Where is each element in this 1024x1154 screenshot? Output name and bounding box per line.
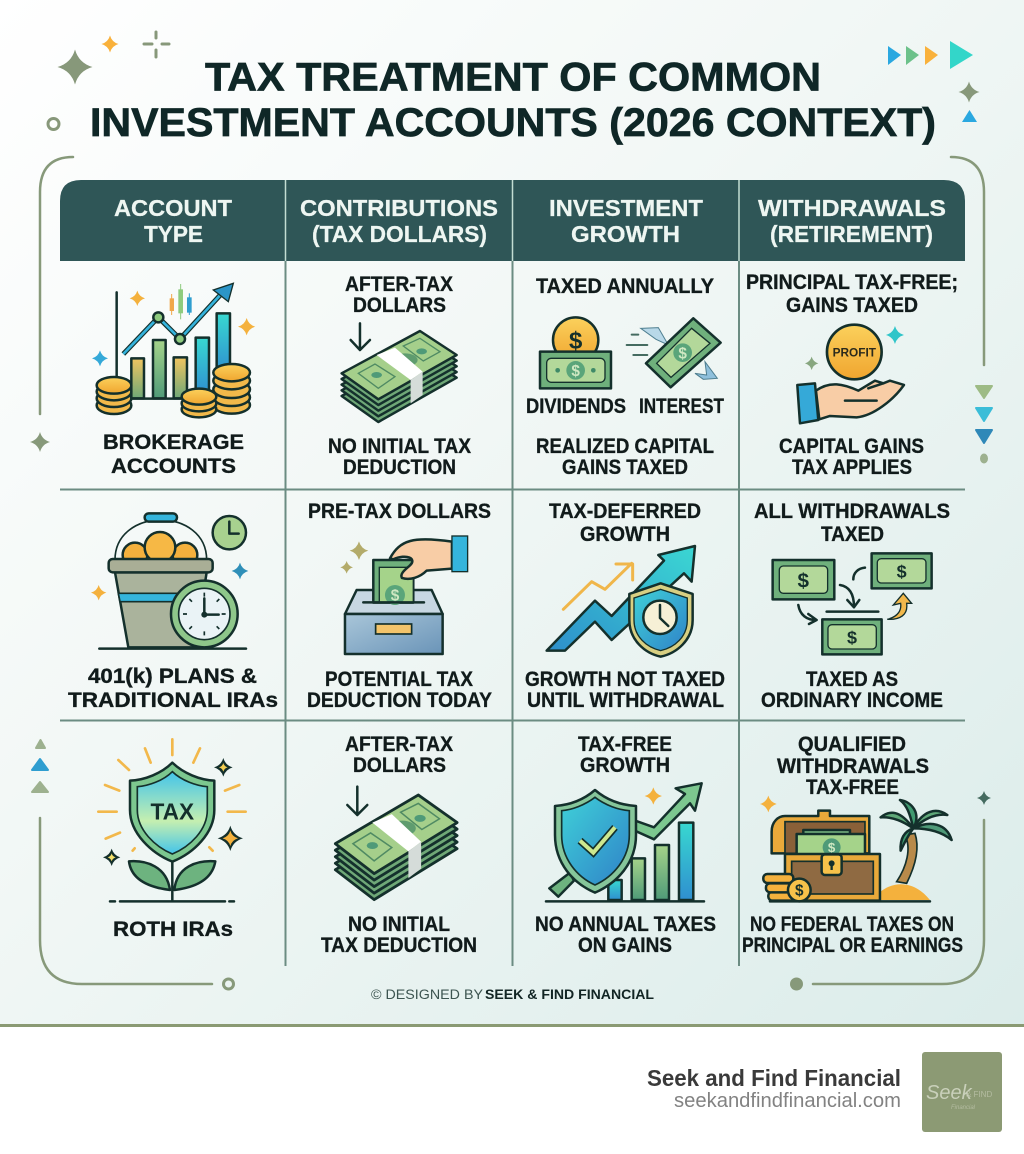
icon: treasure chest and palm tree: [760, 796, 952, 901]
icon: hand dropping money into box: [340, 536, 468, 654]
row 3 growth: [535, 732, 716, 957]
label: 401(k) plans & traditional IRAs: [68, 664, 278, 712]
note: no initial tax deduction: [328, 434, 472, 479]
note: no annual taxes on gains: NO ANNUAL TAXES: [535, 912, 716, 936]
icon: flying interest bill: $: [678, 345, 687, 362]
icon: hand holding profit coin: PROFIT: [833, 346, 877, 360]
note: no federal taxes on principal or earnings: PRINCIPAL OR EARNINGS: [742, 933, 963, 957]
table header: (RETIREMENT): [770, 221, 933, 247]
heading: tax-deferred growth: TAX-DEFERRED: [549, 499, 701, 523]
heading: tax-free growth: TAX-FREE: [578, 732, 672, 756]
label: brokerage accounts: ACCOUNTS: [111, 454, 236, 478]
table header: INVESTMENT: [549, 195, 703, 221]
heading: tax-free growth: GROWTH: [580, 753, 670, 777]
note: no federal taxes on principal or earnings: NO FEDERAL TAXES ON: [750, 912, 954, 936]
brand text: Seek and Find Financial: [647, 1065, 901, 1091]
heading: tax-deferred growth: GROWTH: [580, 522, 670, 546]
icon: dividends coin and bill: $: [571, 363, 580, 380]
icon: growth arrows with clock shield: [547, 546, 695, 657]
heading: principal tax-free; gains taxed: [746, 270, 958, 317]
icon: dividends coin and bill: $: [569, 327, 582, 354]
heading: principal tax-free; gains taxed: GAINS TAXED: [786, 293, 918, 317]
note: no initial tax deduction: NO INITIAL TAX: [328, 434, 472, 458]
note: taxed as ordinary income: [761, 667, 943, 712]
footer divider: [0, 1024, 1024, 1027]
icon: three bills with arrows: [773, 553, 932, 654]
table header: CONTRIBUTIONS: [300, 195, 498, 221]
note: realized capital gains taxed: GAINS TAXED: [562, 455, 688, 479]
icon: treasure chest and palm tree: $: [828, 840, 836, 855]
heading: after-tax dollars: [345, 732, 454, 777]
heading: all withdrawals taxed: [754, 499, 950, 546]
heading: qualified withdrawals tax-free: [777, 732, 929, 799]
title: TAX TREATMENT OF COMMON: [205, 56, 821, 100]
table header: WITHDRAWALS: [758, 195, 946, 221]
row 2 contributions: [307, 499, 492, 712]
brand logo: [922, 1052, 1002, 1132]
brand text: [647, 1065, 901, 1112]
labels: dividends and interest: [526, 394, 724, 418]
side ornaments: [30, 386, 992, 805]
brand logo: Financial: [951, 1105, 976, 1111]
icon: tax shield on plant: [98, 739, 246, 901]
note: growth not taxed until withdrawal: [525, 667, 725, 712]
note: no annual taxes on gains: [535, 912, 716, 957]
note: capital gains tax applies: CAPITAL GAINS: [779, 434, 924, 458]
row 1 withdrawals: [746, 270, 958, 479]
note: realized capital gains taxed: [536, 434, 714, 479]
heading: qualified withdrawals tax-free: QUALIFIED: [798, 732, 906, 756]
heading: qualified withdrawals tax-free: TAX-FREE: [806, 775, 899, 799]
heading: after-tax dollars: AFTER-TAX: [345, 272, 454, 296]
row 2 401k: account type: [68, 513, 278, 712]
icon: hand dropping money into box: $: [391, 588, 400, 605]
label: brokerage accounts: BROKERAGE: [103, 430, 244, 454]
brand text: seekandfindfinancial.com: [674, 1090, 901, 1112]
heading: tax-deferred growth: [549, 499, 701, 546]
note: potential tax deduction today: POTENTIAL TAX: [325, 667, 474, 691]
heading: pre-tax dollars: PRE-TAX DOLLARS: [308, 499, 491, 523]
note: no initial tax deduction: DEDUCTION: [343, 455, 456, 479]
frame brackets: [40, 157, 984, 990]
icon: coin bucket and clock: [91, 513, 248, 649]
icon: money stack with arrow: [335, 787, 457, 900]
table header: (TAX DOLLARS): [312, 221, 487, 247]
table header: TYPE: [144, 221, 203, 247]
heading: after-tax dollars: [345, 272, 454, 317]
row 3 contributions: [321, 732, 477, 957]
icon: three bills with arrows: $: [897, 561, 907, 581]
note: taxed as ordinary income: TAXED AS: [806, 667, 898, 691]
footer band: [0, 1027, 1024, 1154]
heading: qualified withdrawals tax-free: WITHDRAWALS: [777, 754, 929, 778]
icon: tax shield on plant: TAX: [151, 798, 194, 824]
note: no initial tax deduction: [321, 912, 477, 957]
heading: tax-free growth: [578, 732, 672, 777]
heading: taxed annually: TAXED ANNUALLY: [536, 274, 714, 298]
row 3 withdrawals: [742, 732, 963, 957]
note: growth not taxed until withdrawal: UNTIL WITHDRAWAL: [527, 688, 724, 712]
note: taxed as ordinary income: ORDINARY INCOME: [761, 688, 943, 712]
heading: after-tax dollars: AFTER-TAX: [345, 732, 454, 756]
note: capital gains tax applies: TAX APPLIES: [792, 455, 912, 479]
credit line: [371, 987, 654, 1002]
decorative top-right arrows: [888, 41, 980, 122]
table header: [60, 180, 965, 261]
decorative top-left sparkles: [48, 32, 169, 130]
row 2 withdrawals: [754, 499, 950, 712]
icon: money stack with arrow: [342, 323, 457, 422]
note: no initial tax deduction: TAX DEDUCTION: [321, 933, 477, 957]
table header: GROWTH: [571, 221, 680, 247]
icon: three bills with arrows: $: [798, 569, 810, 592]
heading: principal tax-free; gains taxed: PRINCIPAL TAX-FREE;: [746, 270, 958, 294]
title: [90, 56, 936, 145]
note: no initial tax deduction: NO INITIAL: [348, 912, 450, 936]
note: capital gains tax applies: [779, 434, 924, 479]
brand logo: Seek: [926, 1082, 973, 1104]
icon: flying interest bill: [627, 318, 721, 387]
label: 401(k) plans & traditional IRAs: TRADITIONAL IRAs: [68, 688, 278, 712]
credit line: © DESIGNED BY: [371, 987, 483, 1002]
icon: treasure chest and palm tree: $: [795, 883, 804, 900]
label: brokerage accounts: [103, 430, 244, 478]
row 1 growth: [526, 274, 724, 479]
heading: after-tax dollars: DOLLARS: [353, 293, 446, 317]
row 1 brokerage: account type: [92, 283, 255, 478]
note: no annual taxes on gains: ON GAINS: [578, 933, 672, 957]
note: growth not taxed until withdrawal: GROWTH NOT TAXED: [525, 667, 725, 691]
label: 401(k) plans & traditional IRAs: 401(k) PLANS &: [88, 664, 257, 688]
labels: dividends and interest: INTEREST: [639, 394, 724, 418]
icon: three bills with arrows: $: [847, 627, 857, 647]
row 2 growth: [525, 499, 725, 712]
heading: all withdrawals taxed: TAXED: [821, 522, 884, 546]
note: no federal taxes on principal or earnings: [742, 912, 963, 957]
icon: check shield with bars: [546, 783, 704, 901]
heading: all withdrawals taxed: ALL WITHDRAWALS: [754, 499, 950, 523]
heading: after-tax dollars: DOLLARS: [353, 753, 446, 777]
icon: dividends coin and bill: [540, 317, 611, 388]
labels: dividends and interest: DIVIDENDS: [526, 394, 626, 418]
row 1 contributions: [328, 272, 472, 479]
icon: chart with coins: [92, 283, 255, 417]
title: INVESTMENT ACCOUNTS (2026 CONTEXT): [90, 101, 936, 145]
icon: hand holding profit coin: [797, 325, 904, 423]
note: potential tax deduction today: DEDUCTION TODAY: [307, 688, 492, 712]
row 3 Roth: account type: [98, 739, 246, 941]
label: Roth IRAs: ROTH IRAs: [113, 917, 233, 941]
note: potential tax deduction today: [307, 667, 492, 712]
brand logo: & FIND: [966, 1090, 992, 1099]
credit line: SEEK & FIND FINANCIAL: [485, 987, 654, 1002]
table header: ACCOUNT: [114, 195, 232, 221]
note: realized capital gains taxed: REALIZED CAPITAL: [536, 434, 714, 458]
